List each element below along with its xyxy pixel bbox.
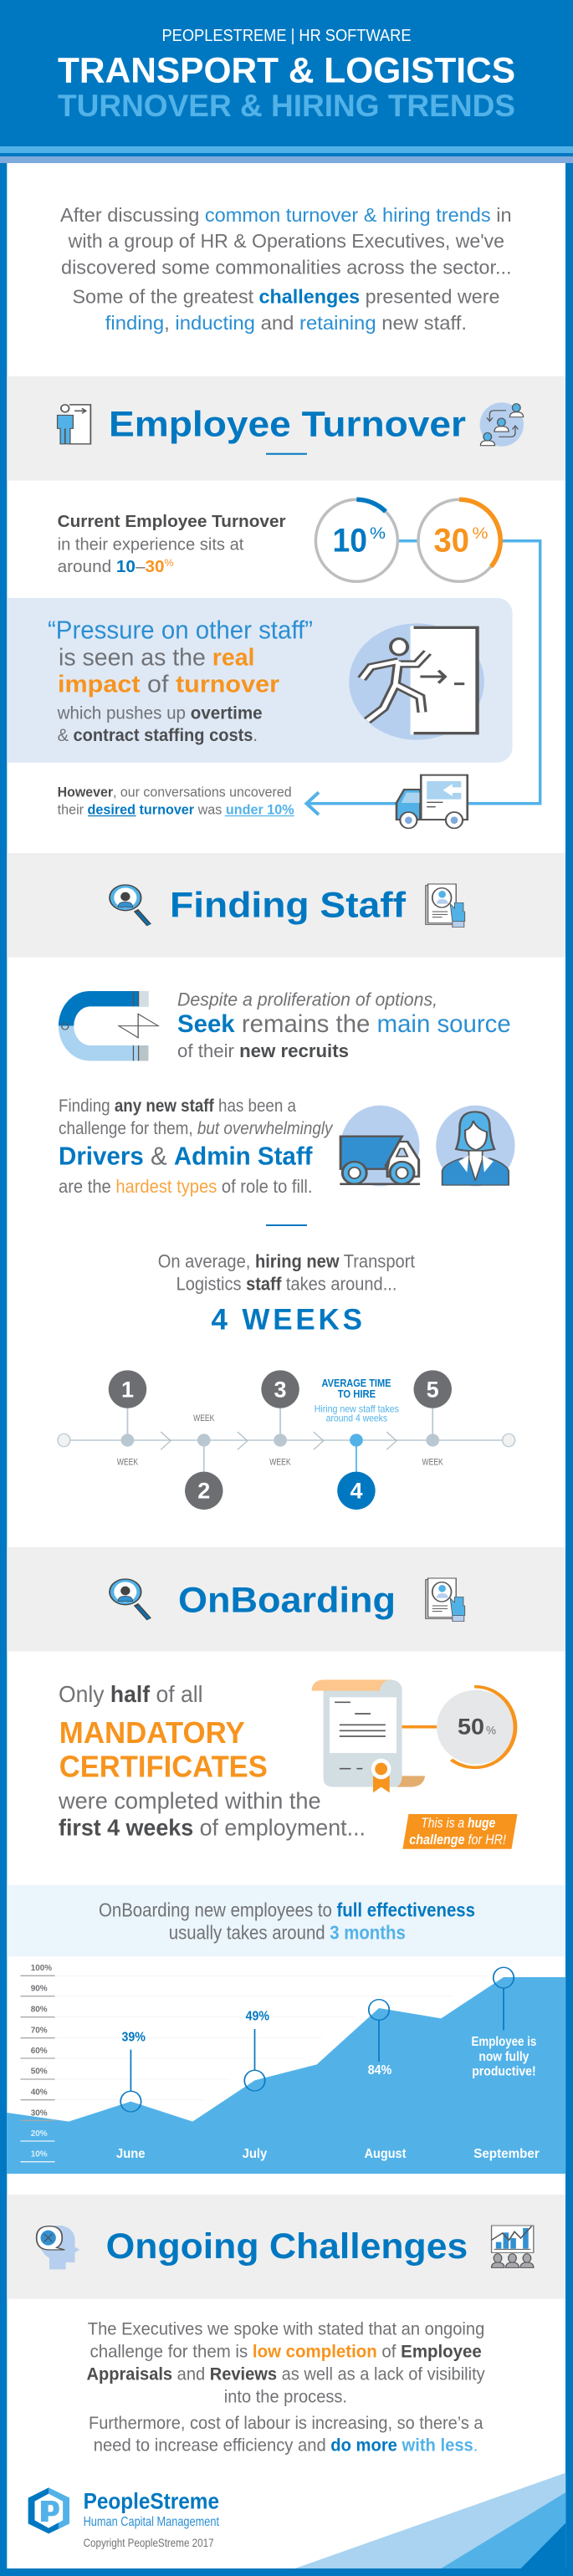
data labels (122, 2010, 536, 2079)
hiring text (158, 1251, 415, 1294)
timeline chart: 5 (427, 1377, 439, 1402)
donut: 50 percent (402, 1687, 515, 1767)
y axis labels: 60% (31, 2046, 48, 2056)
donut: 50 percent: % (486, 1723, 496, 1736)
timeline chart (58, 1370, 515, 1510)
month labels: July (243, 2147, 267, 2161)
intro text: Some of the greatest challenges presented were (72, 286, 500, 308)
icon: certificate (312, 1679, 425, 1792)
timeline chart: 4 (350, 1479, 363, 1504)
icon: logo hexagon (28, 2487, 69, 2533)
icon: person running through exit door (349, 623, 484, 740)
panel: onboarding effectiveness intro: usually takes around 3 months (169, 1921, 406, 1943)
y axis labels: 20% (31, 2129, 48, 2139)
hiring text: On average, hiring new Transport (158, 1251, 415, 1272)
section band: onboarding (7, 1547, 565, 1652)
icon: magnifier with person (110, 885, 149, 925)
hardest roles text: Finding any new staff has been a (59, 1096, 296, 1116)
header (0, 0, 573, 163)
closing text: challenge for them is low completion of Employee (90, 2341, 482, 2361)
callout: average time to hire: TO HIRE (338, 1388, 376, 1400)
donut: 10 percent (315, 499, 397, 581)
data labels: 49% (246, 2010, 269, 2024)
y axis labels: 80% (31, 2005, 48, 2015)
donut: 30 percent (418, 499, 500, 581)
data labels: Employee is (472, 2035, 536, 2049)
mandatory certificates text (58, 1681, 366, 1840)
footer logo: Human Capital Management (84, 2515, 219, 2529)
hardest roles text: challenge for them, but overwhelmingly (59, 1119, 334, 1138)
panel: onboarding effectiveness intro: OnBoarding new employees to full effectiveness (99, 1899, 475, 1921)
month labels (116, 2147, 540, 2161)
icon: magnifier with person (110, 1579, 149, 1619)
donut: 10 percent: 10 (333, 522, 367, 559)
intro text: discovered some commonalities across the sector... (61, 256, 512, 278)
arrow path: connector to desired turnover (306, 541, 540, 815)
impact text: impact of turnover (58, 671, 279, 698)
callout: huge challenge (402, 1814, 517, 1849)
closing text (87, 2319, 485, 2456)
month labels: June (116, 2147, 146, 2161)
decorative divider (266, 1224, 307, 1226)
seek text: of their new recruits (177, 1040, 349, 1061)
footer logo: Copyright PeopleStreme 2017 (84, 2536, 214, 2549)
current turnover text: % (165, 557, 174, 569)
donut: 50 percent: 50 (458, 1714, 484, 1739)
closing text: Furthermore, cost of labour is increasing, so there’s a (89, 2413, 483, 2433)
seek text: Despite a proliferation of options, (177, 989, 437, 1010)
panel: pressure on staff (7, 598, 513, 763)
timeline chart: WEEK (422, 1458, 443, 1468)
donut: 10 percent: % (370, 525, 386, 543)
mandatory certificates text: first 4 weeks of employment... (59, 1814, 366, 1840)
icon: dump truck (340, 1106, 420, 1186)
closing text: into the process. (224, 2386, 347, 2406)
donut: 30 percent: 30 (433, 522, 469, 559)
footer logo (28, 2487, 219, 2549)
closing text: The Executives we spoke with stated that an ongoing (88, 2319, 484, 2339)
intro text (60, 204, 512, 334)
intro text: finding, inducting and retaining new staff. (105, 312, 467, 334)
month labels: August (365, 2147, 407, 2161)
timeline chart: WEEK (269, 1458, 291, 1468)
mandatory certificates text: Only half of all (59, 1681, 202, 1707)
mandatory certificates text: CERTIFICATES (59, 1749, 268, 1783)
y axis labels: 10% (31, 2149, 48, 2159)
quote text: “Pressure on other staff” (48, 615, 313, 644)
desired turnover text: However, our conversations uncovered (58, 785, 292, 800)
icon: admin woman (436, 1106, 515, 1186)
title line 1: TRANSPORT & LOGISTICS (58, 50, 515, 90)
y axis labels: 70% (31, 2025, 48, 2035)
closing text: need to increase efficiency and do more with less. (94, 2435, 478, 2456)
data labels: 84% (368, 2063, 391, 2078)
callout: huge challenge: This is a huge (421, 1815, 495, 1831)
intro text: After discussing common turnover & hiring trends in (60, 204, 512, 226)
footer logo: PeopleStreme (84, 2488, 219, 2513)
icon: head with speech bubble (37, 2226, 79, 2269)
icon: staff rotation (480, 402, 524, 447)
section band: ongoing challenges (7, 2195, 565, 2299)
decorative corner triangles (295, 2473, 565, 2568)
heading: onboarding: OnBoarding (178, 1580, 396, 1620)
impact text: is seen as the real (59, 644, 254, 671)
y axis labels: 100% (31, 1963, 53, 1973)
y axis labels (31, 1963, 53, 2159)
icon: employee leaving door (58, 405, 90, 444)
timeline chart: 1 (121, 1377, 134, 1402)
y axis labels: 50% (31, 2067, 48, 2077)
heading: ongoing challenges: Ongoing Challenges (106, 2226, 468, 2267)
callout: average time to hire: AVERAGE TIME (321, 1377, 391, 1389)
area chart: productivity (7, 1963, 565, 2174)
icon: resume under magnifier (426, 884, 465, 928)
desired turnover text: their desired turnover was under 10% (58, 802, 294, 818)
current turnover text: Current Employee Turnover (58, 513, 286, 531)
intro text: with a group of HR & Operations Executives, we've (68, 230, 504, 252)
callout: average time to hire (315, 1377, 399, 1424)
data labels: productive! (472, 2065, 536, 2079)
heading: employee turnover: Employee Turnover (109, 405, 466, 445)
heading: finding staff: Finding Staff (170, 886, 407, 926)
timeline chart: 3 (274, 1377, 287, 1402)
y axis labels: 90% (31, 1984, 48, 1994)
hardest roles text: are the hardest types of role to fill. (59, 1176, 313, 1197)
y axis labels: 30% (31, 2108, 48, 2118)
title line 2: TURNOVER & HIRING TRENDS (58, 89, 515, 123)
timeline chart: 2 (197, 1479, 210, 1504)
month labels: September (473, 2147, 540, 2161)
timeline chart: WEEK (117, 1458, 139, 1468)
donut: 30 percent: % (472, 525, 489, 543)
callout: average time to hire: Hiring new staff takes (315, 1403, 399, 1414)
impact text: & contract staffing costs. (58, 726, 258, 745)
panel: onboarding effectiveness intro (7, 1885, 565, 1956)
desired turnover text (58, 785, 294, 818)
callout: average time to hire: around 4 weeks (326, 1413, 387, 1424)
current turnover text (58, 513, 286, 576)
hiring text: Logistics staff takes around... (177, 1273, 396, 1294)
hardest roles text (59, 1096, 334, 1197)
icon: delivery truck (396, 775, 468, 828)
timeline chart: WEEK (193, 1413, 215, 1423)
icon: presentation chart with audience (492, 2226, 534, 2267)
impact text (57, 644, 279, 745)
callout: huge challenge: challenge for HR! (409, 1832, 506, 1848)
icon: magnet (59, 991, 158, 1061)
mandatory certificates text: MANDATORY (59, 1715, 245, 1750)
mandatory certificates text: were completed within the (58, 1788, 321, 1814)
icon: resume under magnifier (426, 1578, 465, 1622)
seek text (177, 989, 511, 1061)
closing text: Appraisals and Reviews as well as a lack of visibility (87, 2364, 485, 2384)
header kicker: PEOPLESTREME | HR SOFTWARE (162, 26, 412, 45)
current turnover text: in their experience sits at (58, 535, 244, 554)
data labels: 39% (122, 2031, 146, 2045)
current turnover text: around 10–30 (58, 558, 164, 576)
hardest roles text: Drivers & Admin Staff (59, 1142, 313, 1171)
impact text: which pushes up overtime (57, 703, 263, 723)
stat: 4 weeks: 4 WEEKS (211, 1303, 362, 1336)
y axis labels: 40% (31, 2087, 48, 2097)
data labels: now fully (478, 2050, 530, 2064)
section band: finding staff (7, 853, 565, 958)
section band: employee turnover (7, 376, 565, 480)
seek text: Seek remains the main source (177, 1010, 511, 1038)
